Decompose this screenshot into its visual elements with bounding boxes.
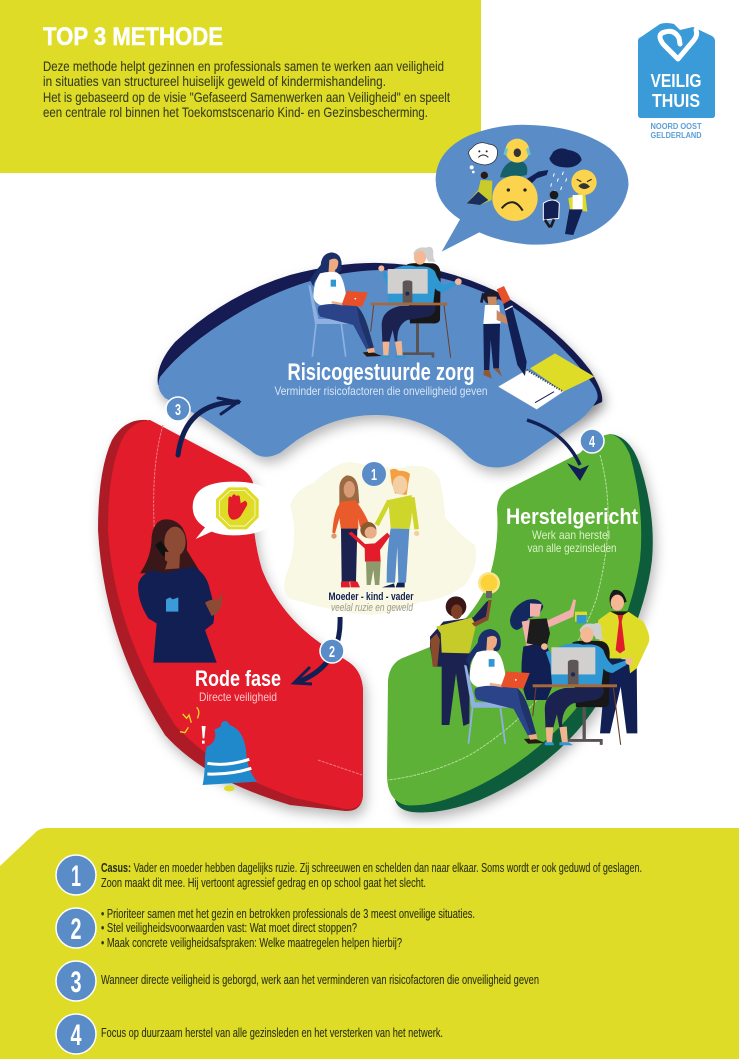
logo: Veilig Thuis: VEILIG (650, 71, 702, 91)
intro text: Het is gebaseerd op de visie "Gefaseerd Samenwerken aan Veiligheid" en speelt (43, 89, 450, 105)
subheading: directe veiligheid: Directe veiligheid (199, 690, 277, 704)
step 2: • Maak concrete veiligheidsafspraken: Welke maatregelen helpen hierbij? (101, 935, 402, 950)
icon: alarm bell (180, 707, 257, 791)
step 3 (56, 961, 539, 1001)
step 3: 3 (70, 966, 82, 999)
subheading: Verminder risicofactoren die onveiligheid geven (274, 384, 488, 398)
logo: Veilig Thuis: GELDERLAND (650, 131, 702, 140)
bottom panel (0, 828, 739, 1059)
badge 1 (362, 462, 386, 486)
step 2: 2 (70, 913, 82, 946)
intro text (43, 58, 450, 120)
label: ruzie en geweld: veelal ruzie en geweld (331, 602, 414, 614)
arrow 4 (527, 420, 589, 481)
panel: herstelgericht (387, 434, 653, 812)
logo: Veilig Thuis: NOORD OOST (650, 122, 702, 131)
heading: Risicogestuurde zorg: Risicogestuurde zorg (288, 359, 474, 386)
step 3: Wanneer directe veiligheid is geborgd, werk aan het verminderen van risicofactoren die onveiligheid geven (101, 972, 539, 987)
intro text: een centrale rol binnen het Toekomstscenario Kind- en Gezinsbescherming. (43, 104, 428, 120)
intro text: Deze methode helpt gezinnen en professionals samen te werken aan veiligheid (43, 58, 444, 74)
badge 1: 1 (371, 467, 377, 484)
badge 3 (166, 397, 190, 421)
panel: risicogestuurde zorg (158, 247, 602, 468)
subheading: herstel: van alle gezinsleden (528, 541, 616, 555)
figure: team (430, 590, 649, 745)
speech bubble: emotions (436, 125, 628, 252)
step 4 (56, 1014, 443, 1054)
figure: girl with pencil and notebook (481, 286, 594, 409)
logo: Veilig Thuis: THUIS (652, 91, 700, 111)
step 2: • Prioriteer samen met het gezin en betrokken professionals de 3 meest onveilige situaties. (101, 906, 475, 921)
step 1 (56, 855, 642, 895)
logo: Veilig Thuis (638, 23, 715, 140)
panel: rode fase (98, 420, 363, 811)
intro text: in situaties van structureel huiselijk geweld of kindermishandeling. (43, 73, 386, 89)
icon: stop speech bubble (193, 482, 280, 539)
badge 2 (320, 639, 344, 663)
step 1: Zoon maakt dit mee. Hij vertoont agressief gedrag en op school gaat het slecht. (101, 875, 426, 890)
step 4: Focus op duurzaam herstel van alle gezinsleden en het versterken van het netwerk. (101, 1025, 443, 1040)
step 2: • Stel veiligheidsvoorwaarden vast: Wat moet direct stoppen? (101, 920, 357, 935)
badge 2: 2 (329, 644, 335, 661)
arrow 2 (294, 617, 340, 684)
heading: Rode fase: Rode fase (195, 666, 281, 691)
title: TOP 3 METHODE (43, 23, 223, 51)
badge 4: 4 (589, 434, 595, 451)
step 2 (56, 906, 475, 950)
arrow 3 (178, 398, 238, 455)
label: moeder kind vader: Moeder - kind - vader (328, 591, 414, 603)
figure: two women at desk (308, 247, 462, 358)
subheading: herstel: Werk aan herstel (532, 528, 610, 542)
step 1: 1 (71, 860, 81, 893)
header panel (0, 0, 481, 173)
icon: lightbulb (478, 572, 500, 598)
step 4: 4 (70, 1019, 82, 1052)
subheading: herstel (528, 528, 616, 555)
family illustration (284, 462, 476, 615)
figure: woman on phone (138, 519, 223, 663)
heading: Herstelgericht: Herstelgericht (506, 504, 639, 529)
badge 3: 3 (175, 402, 181, 419)
badge 4 (580, 429, 604, 453)
